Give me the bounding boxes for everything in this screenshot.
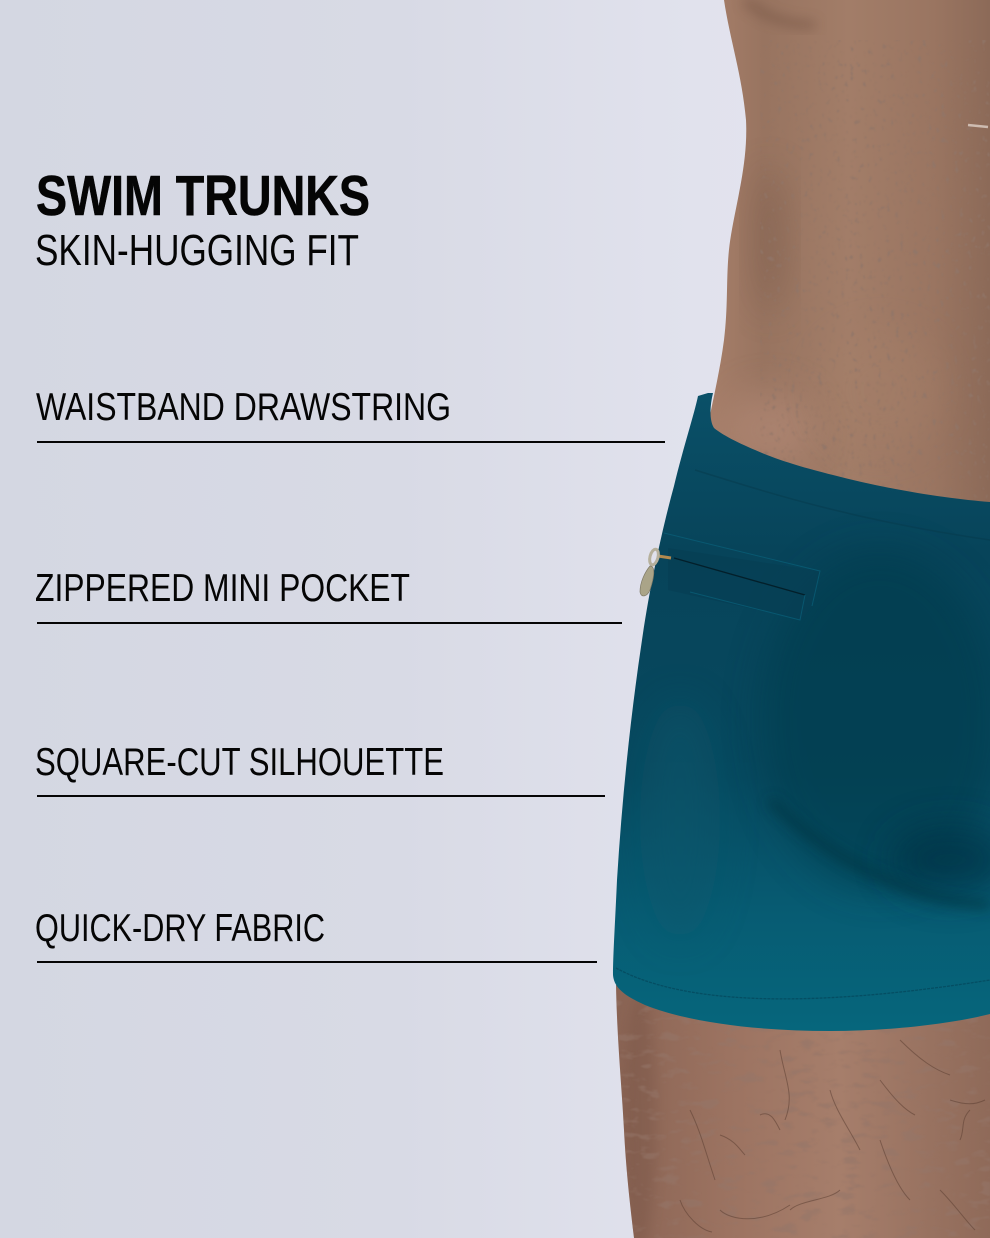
feature: zippered mini pocket: ZIPPERED MINI POCKET <box>35 567 410 610</box>
swim trunks garment <box>613 393 990 1031</box>
feature: waistband drawstring: WAISTBAND DRAWSTRING <box>36 386 451 429</box>
waistband seam <box>695 470 969 536</box>
torso <box>708 0 990 520</box>
title: SWIM TRUNKS <box>36 164 370 228</box>
feature: quick-dry fabric: QUICK-DRY FABRIC <box>35 907 325 950</box>
zipper pocket <box>664 533 820 620</box>
feature: square-cut silhouette: SQUARE-CUT SILHOUETTE <box>35 741 444 784</box>
hem stitching <box>616 968 990 999</box>
subtitle: SKIN-HUGGING FIT <box>35 226 359 275</box>
zipper pull <box>640 548 671 596</box>
thigh <box>616 985 990 1238</box>
